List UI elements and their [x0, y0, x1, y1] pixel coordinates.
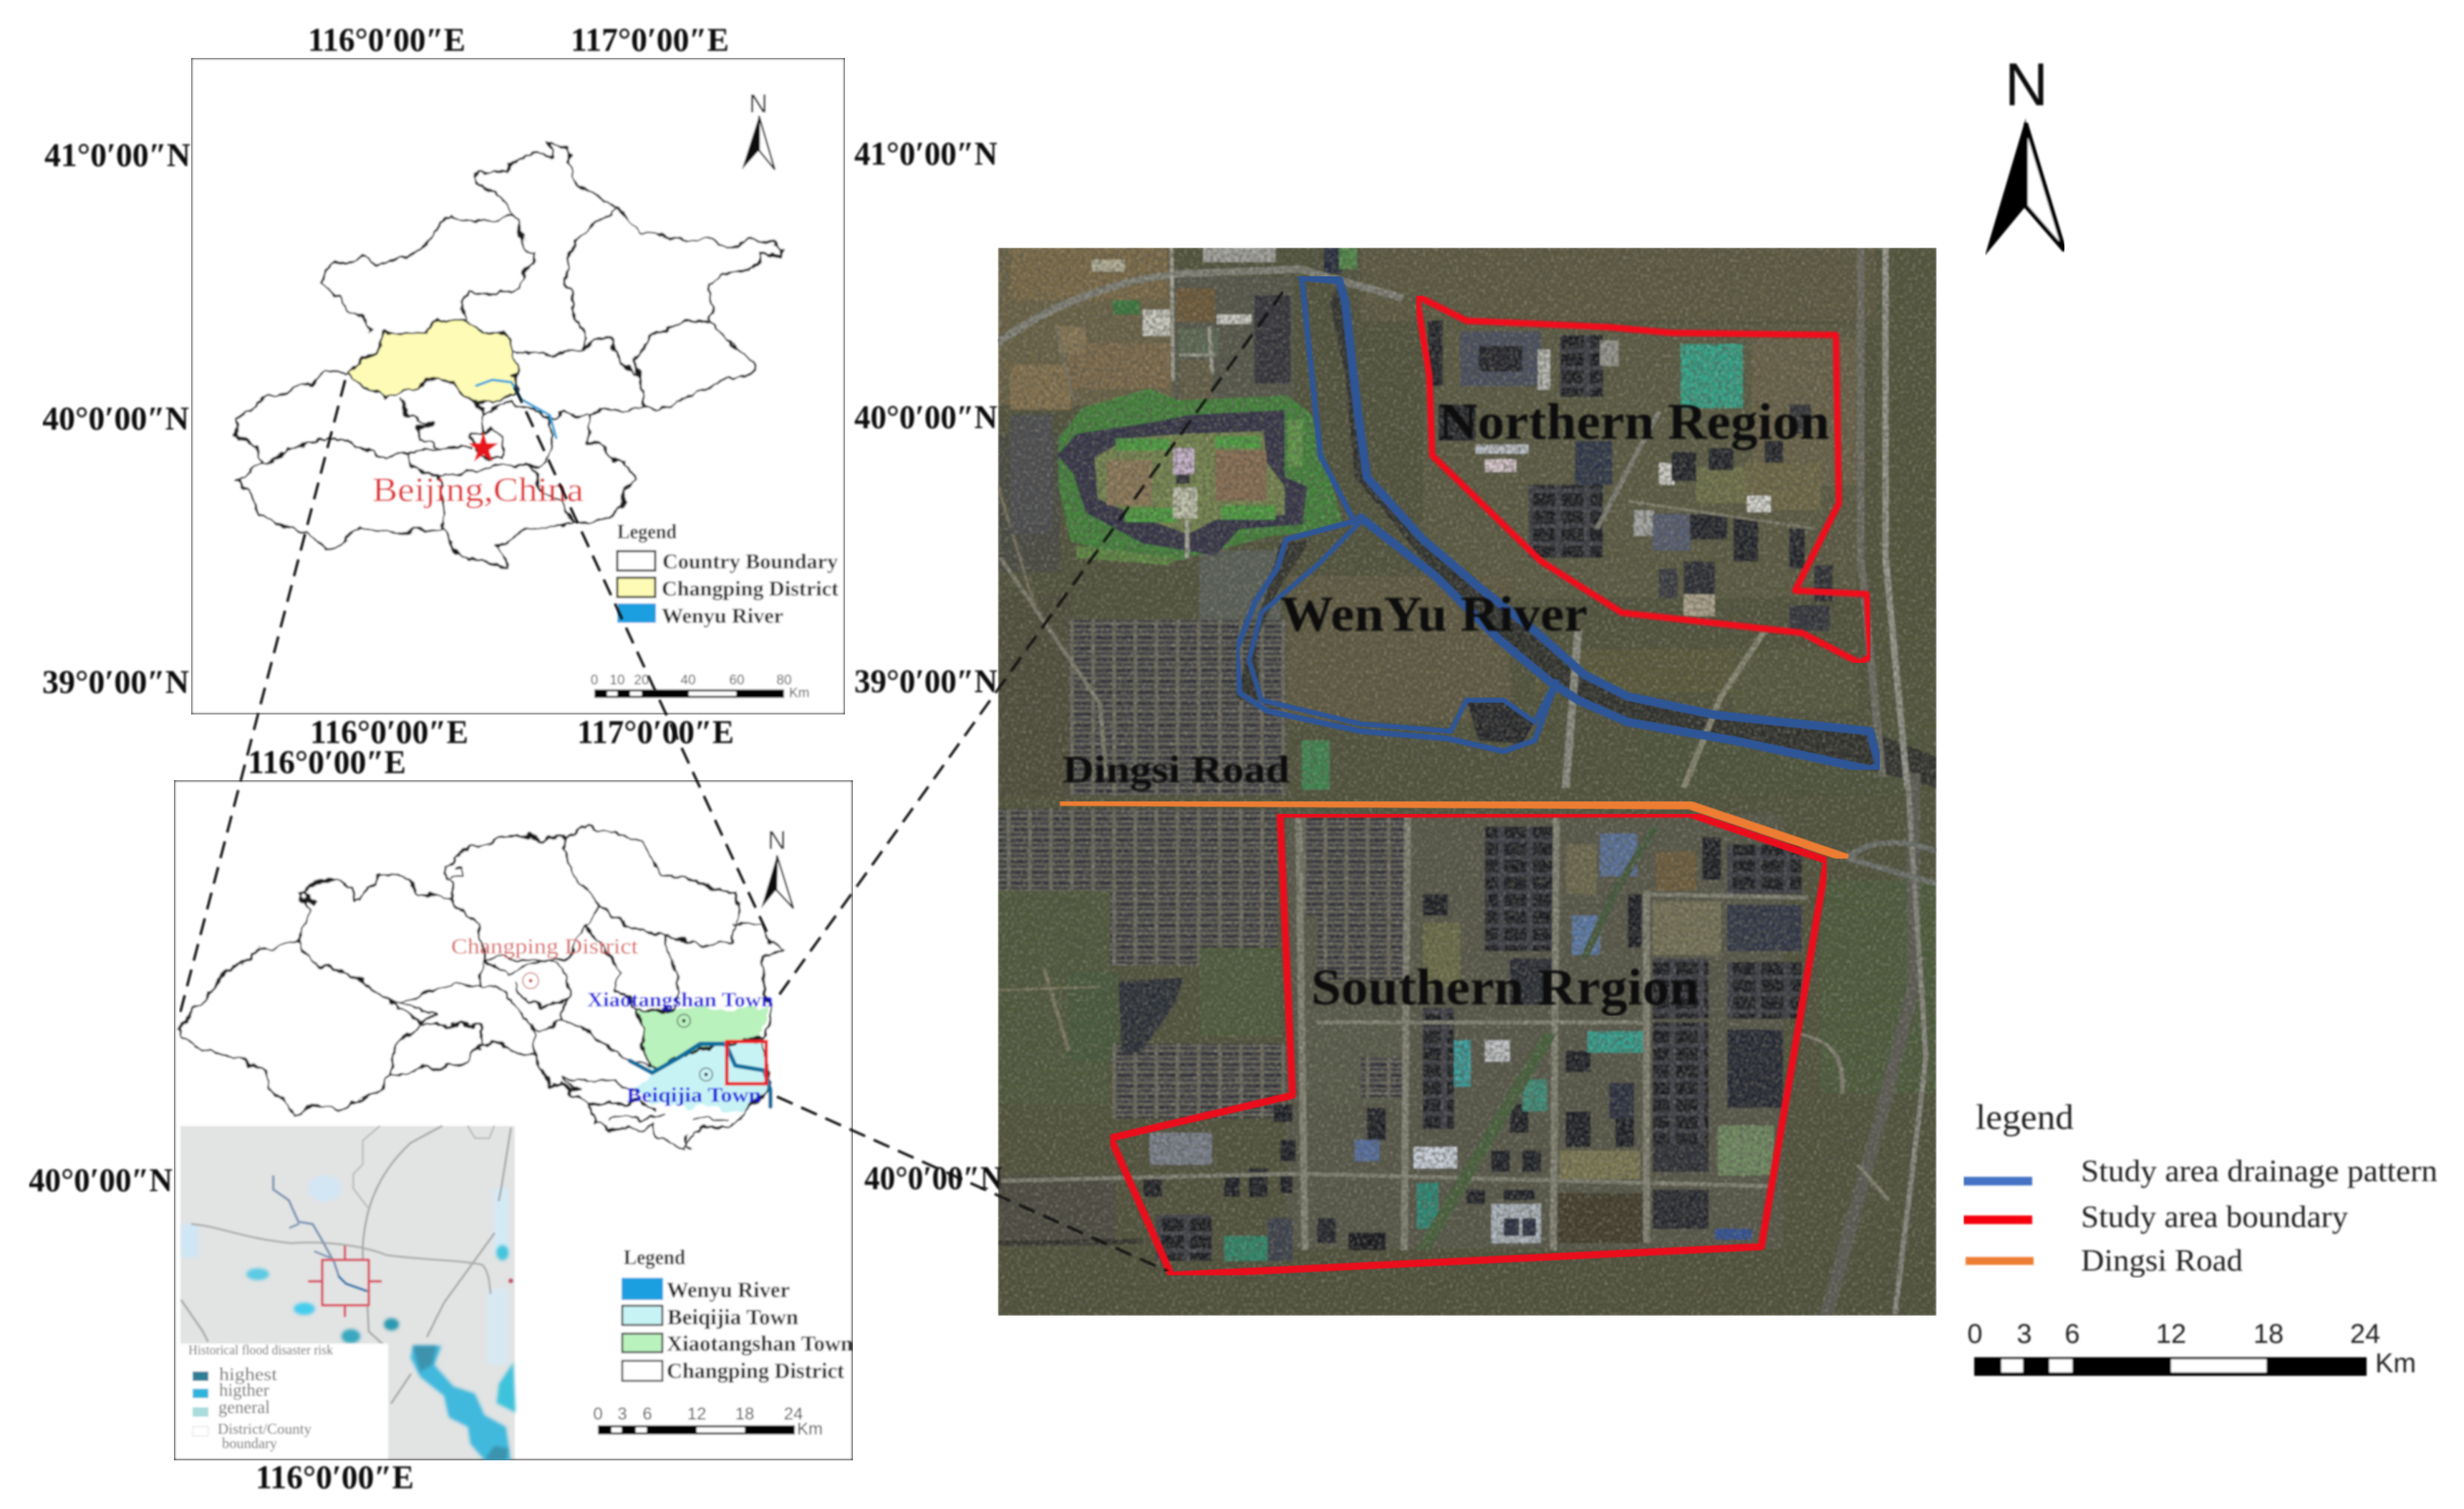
north arrow: N — [768, 825, 786, 855]
scale bar: 0 — [593, 1404, 603, 1424]
inset legend box: higther — [219, 1381, 270, 1400]
legend: Changping District — [662, 577, 839, 601]
icon: Beijing star — [468, 432, 498, 462]
label: WenYu River: WenYu River — [1280, 587, 1588, 642]
main scale bar: 0 — [1967, 1319, 1983, 1349]
grid labels: Changping map: 116°0′00″E — [248, 744, 406, 781]
grid labels: Beijing locator map: 116°0′00″E — [308, 21, 465, 59]
panel: Changping District map — [174, 780, 853, 1460]
study area boundary: northern region — [1416, 296, 1870, 663]
map frame — [191, 58, 845, 714]
main legend — [1963, 1097, 2438, 1278]
Changping township boundaries and town fills — [179, 827, 783, 1147]
grid labels: Beijing locator map: 40°0′00″N — [854, 399, 997, 436]
main scale bar: 18 — [2253, 1319, 2284, 1349]
inset legend box: Historical flood disaster risk — [188, 1343, 333, 1358]
inset legend box — [180, 1343, 388, 1459]
main scale bar: 24 — [2350, 1319, 2380, 1349]
grid labels: Beijing locator map: 116°0′00″E — [310, 714, 468, 751]
main scale bar: 3 — [2016, 1319, 2032, 1349]
legend item: study area boundary — [1963, 1200, 2349, 1234]
dashed zoom connector lines — [179, 291, 1283, 1271]
scale bar: 18 — [735, 1404, 754, 1424]
north arrow — [742, 89, 775, 170]
legend — [622, 1246, 853, 1383]
legend item: study area boundary: Study area boundary — [2081, 1200, 2349, 1234]
main scale bar: 6 — [2064, 1319, 2080, 1349]
scale bar: 3 — [617, 1404, 627, 1424]
legend: Xiaotangshan Town — [667, 1331, 853, 1356]
inset legend box: general — [218, 1398, 270, 1417]
scale bar: 20 — [634, 673, 649, 688]
legend: Beiqijia Town — [667, 1304, 798, 1329]
legend: Wenyu River — [662, 604, 783, 628]
inset legend box: District/County — [218, 1420, 311, 1437]
grid labels: Changping map — [29, 744, 1002, 1496]
label: Xiaotangshan Town: Xiaotangshan Town — [587, 989, 773, 1011]
WenYu River drainage pattern outline — [1237, 276, 1880, 770]
label: Southern Rrgion: Southern Rrgion — [1311, 959, 1699, 1016]
panel: Beijing locator map — [191, 58, 845, 714]
grid labels: Changping map: 40°0′00″N — [29, 1162, 173, 1199]
legend: Legend — [617, 520, 677, 543]
legend item: Dingsi Road: Dingsi Road — [2081, 1244, 2243, 1278]
grid labels: Beijing locator map: 41°0′00″N — [854, 135, 997, 173]
legend: Wenyu River — [667, 1277, 790, 1302]
scale bar: Km — [789, 686, 809, 701]
label: Changping District: Changping District — [451, 933, 638, 959]
scale bar — [593, 1404, 823, 1439]
river through towns — [630, 1044, 770, 1107]
scale bar: 12 — [687, 1404, 706, 1424]
label: Northern Region: Northern Region — [1439, 393, 1830, 450]
label: Beijing, China: Beijing,China — [372, 471, 584, 509]
map frame — [174, 780, 853, 1460]
inset legend box: highest — [219, 1365, 277, 1384]
scale bar: Km — [797, 1420, 823, 1439]
town seat markers — [523, 973, 712, 1081]
main north arrow — [1985, 51, 2064, 256]
scale bar — [591, 673, 809, 701]
scale bar: 60 — [729, 673, 745, 688]
legend title: legend — [1976, 1097, 2074, 1137]
scale bar: 10 — [609, 673, 625, 688]
main scale bar — [1967, 1319, 2416, 1379]
legend item: Dingsi Road — [1966, 1244, 2243, 1278]
main north arrow: N — [2005, 51, 2048, 118]
legend: Country Boundary — [662, 550, 838, 573]
legend — [617, 520, 839, 628]
inset legend box: boundary — [222, 1435, 277, 1452]
Dingsi Road line — [1060, 802, 1848, 858]
label: Dingsi Road: Dingsi Road — [1063, 748, 1290, 791]
grid labels: Beijing locator map — [42, 21, 997, 751]
scale bar: 24 — [784, 1404, 803, 1424]
grid labels: Beijing locator map: 39°0′00″N — [42, 664, 189, 701]
Wenyu River line — [476, 380, 556, 438]
study area red box — [727, 1042, 766, 1084]
scale bar: 0 — [591, 673, 598, 688]
legend: Legend — [624, 1246, 685, 1269]
satellite labels — [1063, 393, 1830, 1016]
panel: satellite map of study area — [998, 248, 1936, 1316]
north arrow: N — [749, 89, 768, 118]
main scale bar: 12 — [2156, 1319, 2186, 1349]
north arrow — [761, 825, 793, 908]
grid labels: Changping map: 116°0′00″E — [256, 1459, 414, 1496]
farmland, road and moated golf island — [998, 248, 1402, 606]
grid labels: Changping map: 40°0′00″N — [864, 1160, 1002, 1197]
grid labels: Beijing locator map: 40°0′00″N — [42, 400, 189, 437]
grid labels: Beijing locator map: 117°0′00″E — [571, 21, 729, 59]
inset: historical flood disaster risk map — [180, 1126, 516, 1460]
scale bar: 6 — [642, 1404, 652, 1424]
Beijing district boundaries — [236, 142, 783, 566]
satellite imagery — [998, 248, 1936, 1316]
label: Beiqijia Town: Beiqijia Town — [627, 1084, 761, 1107]
scale bar: 40 — [680, 673, 696, 688]
grid labels: Beijing locator map: 39°0′00″N — [854, 663, 997, 700]
main scale bar: Km — [2375, 1349, 2416, 1379]
scale bar: 80 — [776, 673, 792, 688]
study area boundary: southern region — [1111, 814, 1827, 1275]
legend item: drainage pattern: Study area drainage pattern — [2081, 1155, 2438, 1188]
legend: Changping District — [667, 1358, 845, 1383]
grid labels: Beijing locator map: 117°0′00″E — [577, 714, 734, 751]
grid labels: Beijing locator map: 41°0′00″N — [44, 137, 190, 174]
